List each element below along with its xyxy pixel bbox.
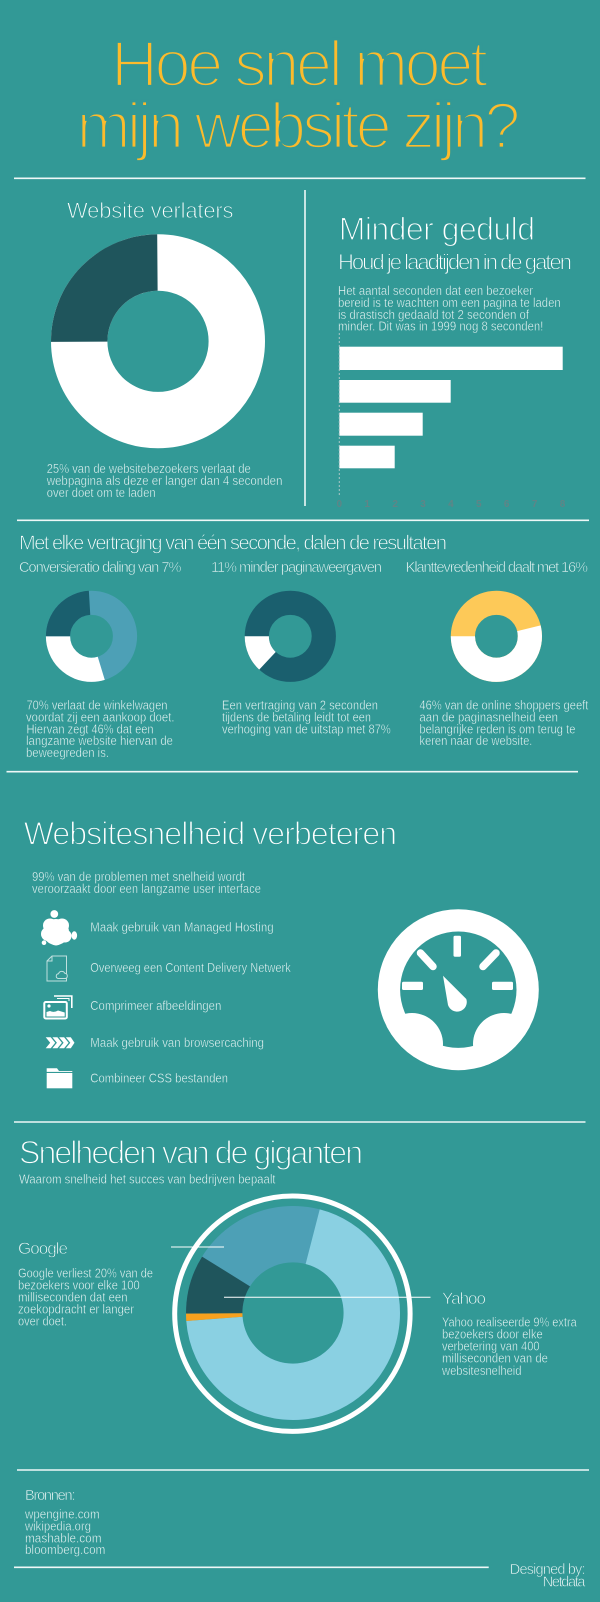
column: conversieratio: Conversieratio daling van 7% [19, 560, 181, 576]
text block: oorzaak [32, 870, 261, 896]
text block: conversieratio: voordat zij een aankoop doet. [26, 710, 174, 724]
text block: seconden: bereid is te wachten om een pagina te laden [338, 296, 561, 310]
text block: conversieratio: Hiervan zegt 46% dat een [26, 722, 154, 736]
heading: vertraging: Met elke vertraging van één seconde, dalen de resultaten [19, 532, 447, 554]
text block: oorzaak: 99% van de problemen met snelheid wordt [32, 870, 245, 884]
callout: yahoo: Yahoo [442, 1289, 486, 1308]
subheading: laadtijden: Houd je laadtijden in de gaten [338, 249, 572, 274]
callout: google: over doet. [18, 1314, 67, 1328]
bar chart: wachttijd: 1 [364, 499, 370, 510]
title [76, 27, 520, 162]
credit [510, 1562, 586, 1591]
text block: conversieratio: langzame website hiervan de [26, 734, 173, 748]
panel: bronnen: wikipedia.org [24, 1519, 91, 1533]
bar chart: wachttijd: 2 [392, 499, 398, 510]
text block: paginaweergaven [222, 698, 391, 736]
list item: afbeeldingen [44, 996, 221, 1018]
text block: seconden: Het aantal seconden dat een bezoeker [338, 284, 533, 298]
donut chart: conversieratio [58, 603, 125, 670]
list item: managed hosting [41, 910, 274, 946]
panel: bronnen: wpengine.com [24, 1507, 100, 1521]
subheading: giganten: Waarom snelheid het succes van bedrijven bepaalt [19, 1172, 276, 1186]
column: conversieratio [19, 560, 181, 760]
callout: google [18, 1239, 224, 1328]
bar chart: wachttijd: 0 [337, 499, 343, 510]
text block: paginaweergaven: tijdens de betaling leidt tot een [222, 710, 371, 724]
caption: website verlaters [46, 462, 282, 500]
donut chart: giganten [214, 1234, 372, 1392]
bar chart: wachttijd [337, 333, 566, 510]
heading: website verlaters: Website verlaters [67, 198, 234, 223]
column: klanttevredenheid [406, 560, 589, 748]
panel: bronnen: mashable.com [25, 1531, 102, 1545]
heading: websitesnelheid: Websitesnelheid verbeteren [24, 815, 397, 851]
callout: yahoo: websitesnelheid [441, 1364, 522, 1378]
callout: yahoo: Yahoo realiseerde 9% extra [442, 1316, 577, 1330]
panel: websitesnelheid verbeteren [24, 815, 539, 1088]
credit: Designed by: [510, 1562, 586, 1578]
credit: Netdata [543, 1575, 586, 1591]
panel: snelheden van de giganten [18, 1134, 577, 1431]
title: Hoe snel moet [111, 27, 488, 100]
callout: google: Google verliest 20% van de [18, 1266, 153, 1280]
caption: website verlaters: 25% van de websitebezoekers verlaat de [47, 462, 251, 476]
list item: afbeeldingen: Comprimeer afbeeldingen [90, 999, 221, 1013]
callout: yahoo: verbetering van 400 [442, 1340, 540, 1354]
callout: yahoo [224, 1289, 577, 1378]
list item: cdn [47, 956, 291, 981]
text block: paginaweergaven: verhoging van de uitstap met 87% [222, 722, 391, 736]
bar chart: wachttijd: 5 [476, 499, 482, 510]
caption: website verlaters: over doet om te laden [47, 486, 156, 500]
icon: blob [41, 910, 77, 946]
text block: seconden [338, 284, 561, 334]
list item: browsercaching: Maak gebruik van browsercaching [90, 1036, 264, 1050]
caption: website verlaters: webpagina als deze er langer dan 4 seconden [46, 474, 282, 488]
ring [175, 1196, 410, 1431]
text block: klanttevredenheid: aan de paginasnelheid een [419, 710, 558, 724]
text block: paginaweergaven: Een vertraging van 2 seconden [222, 698, 378, 712]
donut chart: paginaweergaven [257, 603, 324, 670]
icon: chevrons [46, 1037, 74, 1048]
callout: google: Google [18, 1239, 68, 1258]
text block: conversieratio: 70% verlaat de winkelwagen [26, 698, 168, 712]
list item: cdn: Overweeg een Content Delivery Netwerk [90, 961, 291, 975]
panel: bronnen: bloomberg.com [25, 1543, 105, 1557]
panel: vertraging resultaten [19, 532, 589, 760]
panel: minder geduld [337, 211, 572, 510]
panel: website verlaters [46, 198, 282, 500]
callout: yahoo: bezoekers door elke [442, 1328, 543, 1342]
text block: conversieratio [26, 698, 174, 760]
text block: oorzaak: veroorzaakt door een langzame user interface [32, 882, 261, 896]
bar chart: wachttijd: 4 [448, 499, 454, 510]
title: mijn website zijn? [76, 89, 520, 162]
text block: klanttevredenheid [419, 698, 589, 748]
column: klanttevredenheid: Klanttevredenheid daalt met 16% [406, 560, 588, 576]
bar chart: wachttijd: 8 [560, 499, 566, 510]
donut chart: website verlaters [79, 262, 237, 420]
callout: google: milliseconden dat een [18, 1290, 128, 1304]
icon: images [44, 996, 72, 1018]
callout: google: bezoekers voor elke 100 [18, 1278, 140, 1292]
text block: conversieratio: beweegreden is. [26, 746, 109, 760]
list item: managed hosting: Maak gebruik van Managed Hosting [90, 921, 274, 935]
bar chart: wachttijd: 3 [420, 499, 426, 510]
list item: css [47, 1068, 228, 1088]
icon: speedometer [378, 909, 539, 1075]
icon: folder [47, 1068, 72, 1088]
column: paginaweergaven: 11% minder paginaweergaven [211, 560, 382, 576]
text block: klanttevredenheid: belangrijke reden is om terug te [419, 722, 575, 736]
callout: google: zoekopdracht er langer [18, 1302, 134, 1316]
text block: klanttevredenheid: keren naar de website. [419, 734, 532, 748]
text block: seconden: minder. Dit was in 1999 nog 8 seconden! [338, 320, 543, 334]
icon: document with cloud [47, 956, 67, 981]
heading: giganten: Snelheden van de giganten [19, 1134, 363, 1170]
callout: yahoo: milliseconden van de [442, 1352, 548, 1366]
text block: seconden: is drastisch gedaald tot 2 seconden of [338, 308, 529, 322]
bar chart: wachttijd: 7 [532, 499, 538, 510]
panel: bronnen [24, 1488, 105, 1557]
bar chart: wachttijd: 6 [504, 499, 510, 510]
column: paginaweergaven [211, 560, 391, 736]
list item: css: Combineer CSS bestanden [90, 1072, 228, 1086]
heading: minder geduld: Minder geduld [339, 211, 535, 247]
donut chart: klanttevredenheid [463, 603, 530, 670]
panel: bronnen: Bronnen: [25, 1488, 75, 1504]
